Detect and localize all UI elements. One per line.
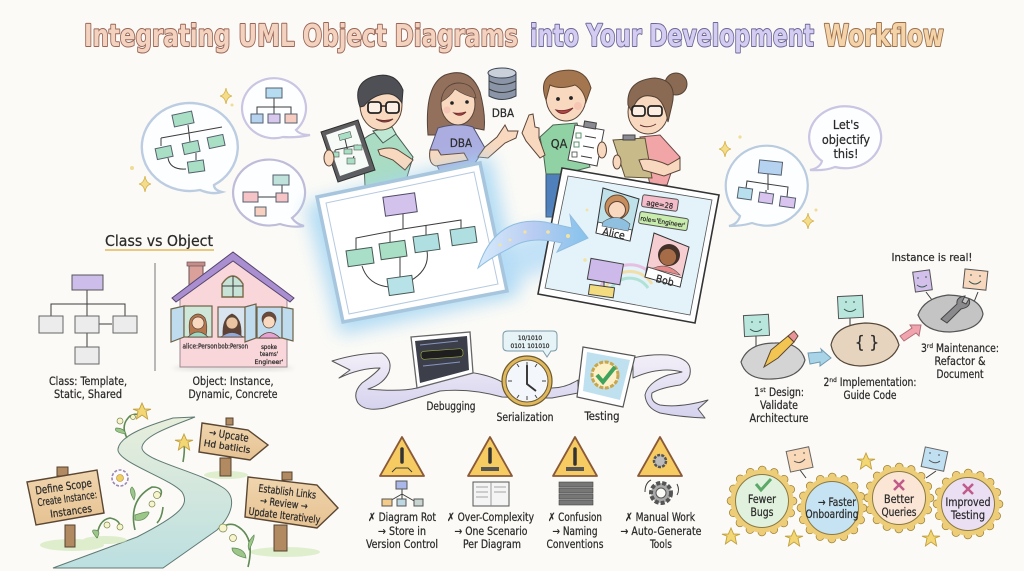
house with instances: spoke [261,344,278,351]
heading: Class vs Object [105,232,214,250]
caption: object: Object: Instance, [192,374,274,388]
arrow: to maintenance [900,325,921,341]
pitfall: confusion [546,437,604,551]
clock: serialization [502,356,552,406]
speech bubble: pink diagram [233,160,305,227]
badge: faster onboarding: Onboarding [806,507,858,521]
pitfall: over-complexity: → One Scenario [454,524,528,538]
caption: maintenance: 3ʳᵈ Maintenance: [921,341,999,355]
windows [171,304,293,342]
title: Integrating UML Object Diagrams [84,19,518,54]
tablet [321,120,375,182]
label: DBA: DBA [492,106,514,120]
card: Alice [596,188,639,242]
caption: implementation [824,375,916,402]
sign: update [199,418,268,476]
glow behind diagrams [305,155,590,335]
label: testing: Testing [584,409,620,423]
panel: pitfalls [366,437,702,551]
title: into Your Development [530,19,814,54]
caption: object: Dynamic, Concrete [188,387,278,401]
laptop screen: debugging [411,332,473,388]
person: analyst with bun [613,73,687,185]
sign: update: Hd batlicls [203,439,251,456]
caption: maintenance [921,341,999,381]
badge: faster onboarding: → Faster [818,495,857,509]
caption: class: Static, Shared [54,387,122,401]
caption: design: Validate [760,398,798,412]
pitfall: over-complexity: ✗ Over-Complexity [447,510,534,524]
caption: class [49,374,127,401]
pitfall: manual work: ✗ Manual Work [625,510,695,524]
grass patches [40,471,320,557]
sparkles: right [719,135,818,229]
card: Alice: Alice [601,226,626,242]
speech bubble: Let's objectify this [809,106,881,170]
arrow: to implementation [808,349,831,366]
caption: class: Class: Template, [49,374,127,388]
speech bubble: Let's objectify this: Let's [833,117,859,132]
caption: implementation: Guide Code [844,388,896,402]
speech bubble: large flow diagram [142,103,238,193]
label: QA shirt: QA [551,136,568,151]
house with instances: Engineer' [254,359,284,366]
bubble: binary: 0101 101010 [510,342,550,350]
polaroid: testing [577,347,635,407]
rock: design [741,331,805,379]
ribbon [332,353,708,418]
house with instances: alice:Person [182,342,218,350]
caption: design: 1ˢᵗ Design: [754,385,804,399]
caption: maintenance: Refactor & [934,354,986,368]
panel: UML class diagram sheet [317,163,507,322]
pitfall: over-complexity [447,437,534,551]
pitfall: over-complexity: Per Diagram [463,537,521,551]
plants [97,414,250,567]
heading: instance is real: Instance is real! [892,252,972,264]
sign: define scope: Instances [49,503,93,521]
sign: define scope: Create Instance: [37,489,98,509]
sign: define scope: Define Scope [34,477,93,497]
title [84,19,944,54]
speech bubble: object diagram [726,146,808,226]
badge: better queries [868,467,930,529]
badge: better queries: Queries [882,505,916,519]
clipboard with checklist [568,121,604,166]
bubble: binary [503,331,557,357]
pitfall: diagram rot [366,437,438,551]
caption: implementation: 2ⁿᵈ Implementation: [824,375,916,389]
person: QA [522,70,606,217]
icon: wrench [941,296,970,323]
person: DBA [427,73,518,172]
speech bubble: Let's objectify this: objectify [822,132,870,147]
badge: fewer bugs: Fewer [748,492,777,506]
character cards [743,269,988,348]
label: DBA shirt: DBA [450,136,472,150]
icon: database cylinder [488,68,516,120]
rock: maintenance [918,295,983,332]
bubble: binary: 10/1010 [518,334,542,342]
sign: establish links: Establish Links [258,483,317,502]
caption: object [188,374,278,401]
pitfall: diagram rot: → Store in [378,524,426,538]
badge: improved testing: Testing [950,508,985,522]
card: Bob [645,233,689,289]
person: developer with tablet [321,75,413,186]
badge: better queries: Better [884,492,915,506]
stars [133,403,151,419]
badge: improved testing: Improved [946,495,990,509]
card: Bob: Bob [654,273,675,289]
panel: winding road roadmap [27,403,338,568]
speech bubble: small org chart [242,78,310,138]
tag: age: age=28 [646,198,674,211]
panel: UML object instance sheet [538,168,719,323]
house with instances: bob:Person [218,342,248,350]
panel: class vs object [39,232,294,401]
rainbow arc [600,265,656,296]
house with instances: teams' [260,351,278,358]
sign: define scope [27,467,104,547]
rock: implementation [831,323,899,366]
sign: update: → Upcate [208,427,250,445]
sparkles: left [130,88,234,192]
icon: pencil [764,331,798,367]
pitfall: manual work [620,437,702,551]
character cards on badges [786,447,948,478]
pitfall: diagram rot: ✗ Diagram Rot [368,510,436,524]
speech bubble: Let's objectify this: this! [833,146,859,161]
pitfall: confusion: → Naming [552,524,598,538]
daisy [112,470,128,486]
label: serialization: Serialization [496,410,554,424]
stars [722,453,940,546]
rock: implementation: { } [855,333,879,353]
badge: fewer bugs: Bugs [750,505,774,519]
panel: benefit badges [722,447,999,546]
sign: establish links: → Review → [259,495,309,513]
sign: establish links [245,472,338,551]
label: debugging: Debugging [426,399,476,413]
tag: age [641,195,679,211]
pitfall: confusion: ✗ Confusion [548,510,602,524]
badge: improved testing [937,473,999,535]
caption: maintenance: Document [936,367,984,381]
caption: design [750,385,808,425]
arrow: class to object [478,209,588,268]
class diagram [39,275,137,364]
sign: establish links: Update Iteratively [248,506,321,526]
badge: fewer bugs [731,470,793,532]
panel: use cases ribbon [332,331,708,424]
pitfall: manual work: Tools [649,537,672,551]
pitfall: confusion: Conventions [546,537,604,551]
house with instances [171,252,294,371]
title: Workflow [824,19,944,54]
caption: design: Architecture [750,411,808,425]
road [53,417,232,568]
panel: lifecycle stepping stones [741,252,999,425]
pitfall: manual work: → Auto-Generate [620,524,702,538]
clipboard tan [613,135,652,178]
pitfall: diagram rot: Version Control [366,537,438,551]
badge: faster onboarding [801,477,863,539]
tag: role: role='Engineer' [640,214,686,230]
